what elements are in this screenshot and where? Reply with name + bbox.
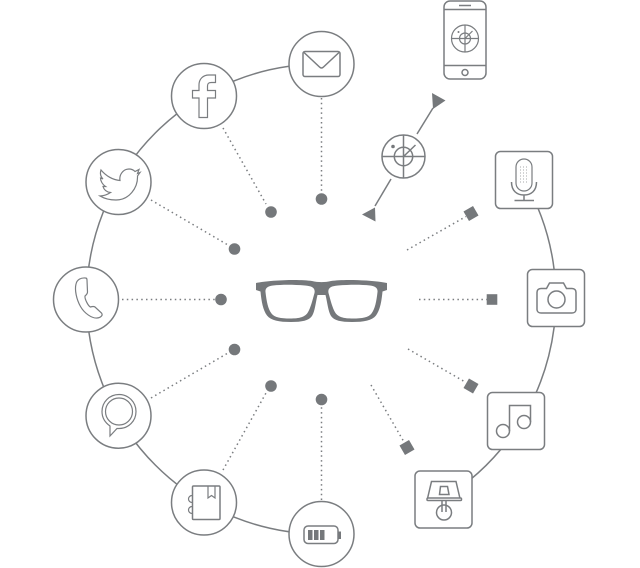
connector: battery (316, 394, 327, 500)
icon: phone handset (76, 278, 102, 318)
node: notebook (172, 470, 236, 535)
glasses (256, 280, 387, 322)
node: camera (528, 270, 584, 326)
node: battery (289, 502, 354, 566)
icon: speech bubble (102, 394, 136, 436)
node: chat (86, 383, 151, 448)
node: facebook (172, 64, 236, 128)
icon: radar (382, 135, 425, 178)
connector: phone (122, 294, 227, 305)
smartphone with radar (444, 1, 486, 79)
ring connecting left-side services (87, 64, 556, 534)
icon: music note (496, 406, 530, 438)
arrow: up right (417, 93, 446, 134)
node: twitter (86, 150, 151, 214)
connector: lamp (371, 385, 415, 455)
icon: twitter bird (100, 169, 140, 200)
node: email (289, 32, 354, 96)
connector: chat (151, 344, 240, 398)
icon: radar small (452, 25, 478, 52)
icon: camera (537, 283, 576, 313)
icon: lamp (427, 482, 462, 520)
icon: microphone (512, 159, 536, 200)
connector: facebook (223, 128, 277, 218)
connector: music (408, 349, 479, 394)
connector: camera (419, 294, 497, 305)
connector: twitter (151, 200, 240, 255)
icon: notebook (189, 486, 220, 520)
radar with arrows (362, 93, 446, 222)
node: music (488, 392, 544, 450)
icon: battery (304, 526, 341, 544)
connector: microphone (407, 206, 479, 250)
icon: envelope (303, 52, 340, 76)
arrow: down left (362, 179, 391, 222)
connector: notebook (223, 380, 277, 470)
icon: facebook f (192, 75, 216, 118)
connector: email (316, 98, 327, 205)
node: microphone (496, 152, 552, 208)
node: lamp (415, 471, 472, 528)
node: phone (54, 267, 118, 332)
